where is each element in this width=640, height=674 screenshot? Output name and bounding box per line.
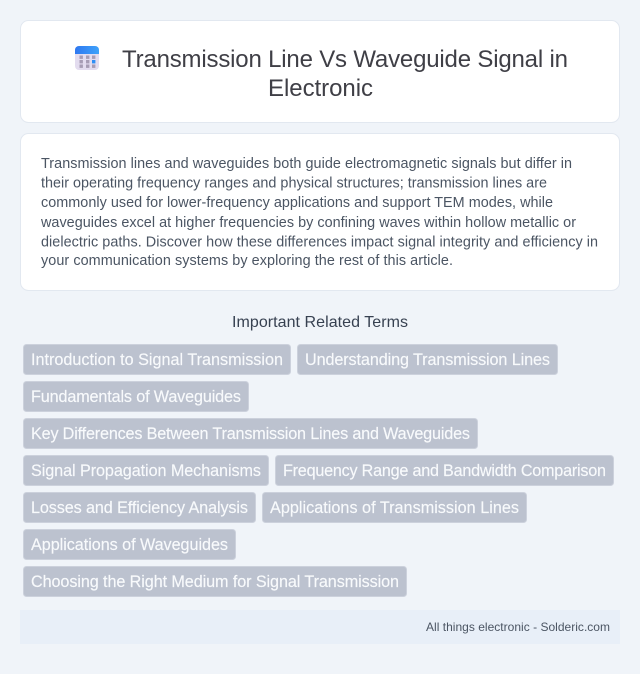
- text block: description: [40, 156, 598, 269]
- text block: description: their operating frequency ranges and physical structures; transmission lines are: [41, 176, 547, 192]
- text block: description: commonly used for lower-frequency applications and support TEM modes, while: [41, 195, 553, 211]
- text block: description: Transmission lines and waveguides both guide electromagnetic signals but differ in: [41, 156, 572, 172]
- tag: [24, 418, 478, 448]
- tag: Choosing the Right Medium for Signal Transmission: [31, 573, 399, 591]
- tag: Fundamentals of Waveguides: [31, 388, 241, 406]
- tag: [24, 382, 248, 412]
- text block: description: your communication systems by exploring the rest of this article.: [41, 253, 453, 269]
- panel: header: [20, 20, 620, 122]
- tag: [262, 492, 526, 522]
- icon: calendar: [75, 46, 99, 70]
- text block: description: waveguides excel at higher frequencies by confining waves within hollow metallic or: [40, 215, 576, 231]
- tag: [276, 456, 614, 486]
- tag: Frequency Range and Bandwidth Comparison: [283, 462, 606, 480]
- tag: [298, 344, 558, 374]
- heading: related terms: Important Related Terms: [232, 314, 408, 331]
- panel: description: [20, 134, 620, 290]
- footer: [20, 610, 620, 644]
- title: Transmission Line Vs Waveguide Signal in: [122, 46, 568, 73]
- tag: Understanding Transmission Lines: [305, 351, 550, 369]
- tag: Applications of Transmission Lines: [270, 499, 519, 517]
- title: [122, 46, 568, 102]
- panel: related term tags: [24, 344, 614, 596]
- tag: Introduction to Signal Transmission: [31, 351, 283, 369]
- tag: [24, 456, 268, 486]
- text block: description: dielectric paths. Discover how these differences impact signal integrity and efficiency in: [41, 234, 598, 250]
- tag: Applications of Waveguides: [31, 536, 228, 554]
- footer: All things electronic - Solderic.com: [426, 620, 610, 634]
- tag: Losses and Efficiency Analysis: [31, 499, 248, 517]
- tag: [24, 566, 406, 596]
- tag: Key Differences Between Transmission Lines and Waveguides: [31, 425, 470, 443]
- title: Electronic: [268, 75, 373, 102]
- tag: Signal Propagation Mechanisms: [31, 462, 261, 480]
- tag: [24, 530, 236, 560]
- tag: [24, 344, 290, 374]
- tag: [24, 492, 256, 522]
